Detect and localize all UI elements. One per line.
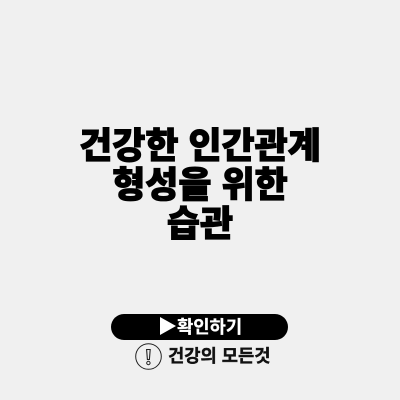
title: 건강한 인간관계 [79,125,321,166]
title: 습관 [167,203,233,244]
title [79,125,321,244]
button: confirm [111,314,288,340]
button label: 확인하기 [177,317,242,337]
icon: play triangle [160,317,176,335]
title: 형성을 위한 [112,164,288,205]
icon: exclamation circle [135,343,162,370]
brand name: 건강의 모든것 [168,346,271,366]
